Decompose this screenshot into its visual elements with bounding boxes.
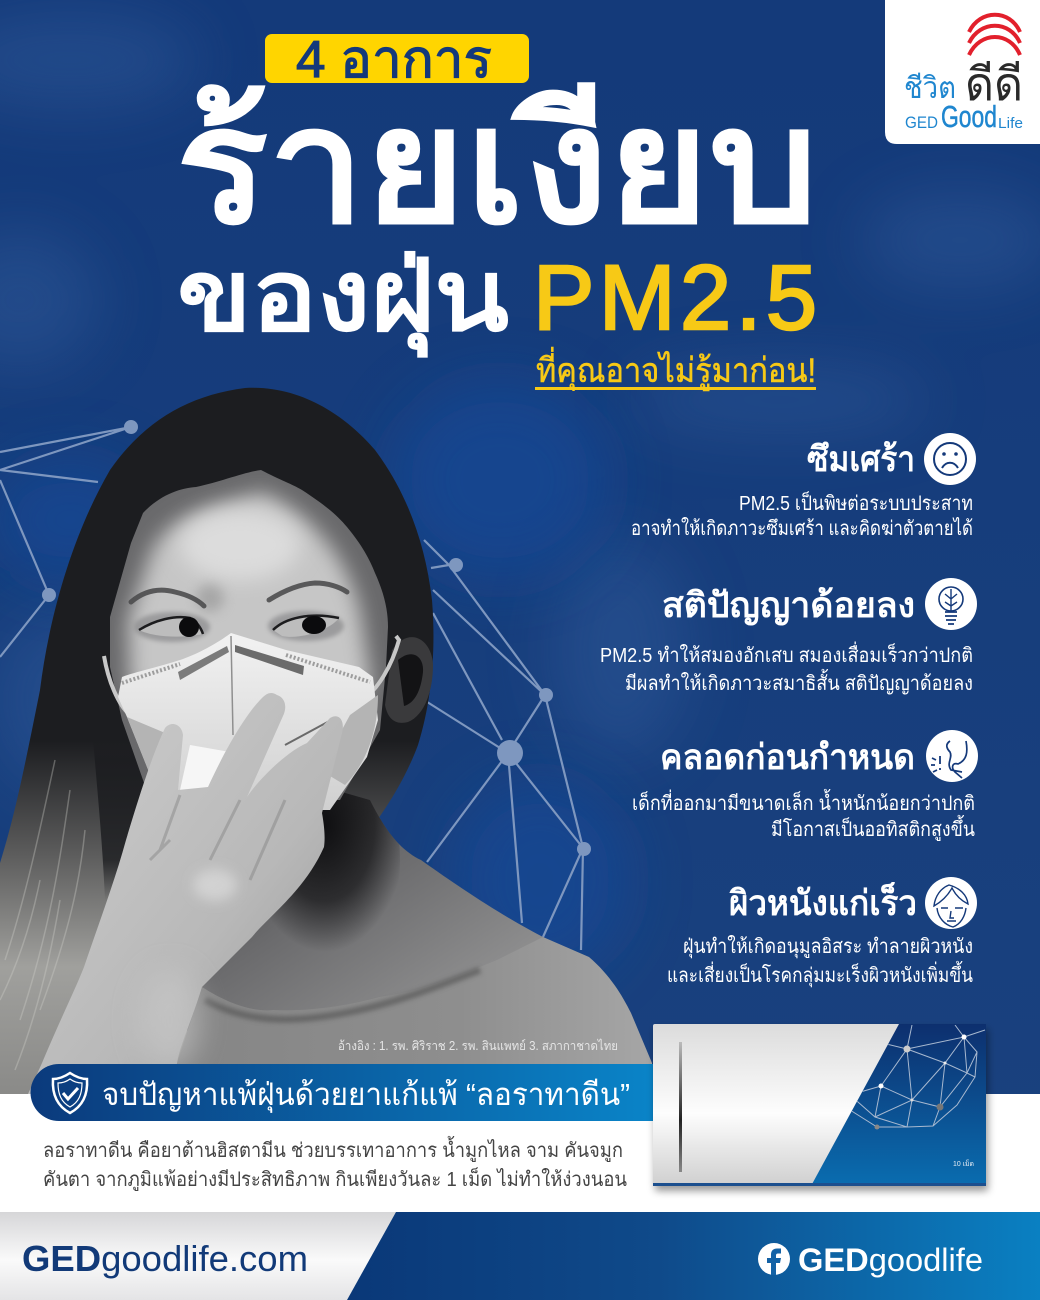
- white product band: [0, 1094, 1040, 1212]
- title block: [176, 31, 818, 391]
- symptom 3: premature birth: คลอดก่อนกำหนด: [660, 738, 915, 777]
- neck shadow: [274, 792, 400, 946]
- symptom 3: premature birth: มีโอกาสเป็นออทิสติกสูงขึ้น: [771, 815, 975, 842]
- banner: end dust allergy: จบปัญหาแพ้ฝุ่นด้วยยาแก้แพ้ “ลอราทาดีน”: [102, 1077, 630, 1114]
- logo text: GED: [905, 113, 938, 132]
- footer: left website strip: [0, 1212, 420, 1300]
- dark hair beside the hand: [95, 758, 144, 896]
- footer: right social strip: GEDgoodlife: [798, 1242, 983, 1278]
- logo arcs: [969, 15, 1020, 55]
- yellow pill: 4 symptoms: 4 อาการ: [296, 31, 492, 89]
- symptom 1: depression: อาจทำให้เกิดภาวะซึมเศร้า และคิดฆ่าตัวตายได้: [631, 517, 973, 540]
- hair: [0, 388, 433, 1094]
- main heading line 1: ร้ายเงียบ: [176, 76, 818, 257]
- product description: ลอราทาดีน คือยาต้านฮิสตามีน ช่วยบรรเทาอาการ น้ำมูกไหล จาม คันจมูก: [43, 1136, 623, 1163]
- product box: 10 เม็ด: [953, 1159, 974, 1168]
- logo text: ชีวิต: [904, 72, 956, 105]
- symptom 2: reduced intelligence: สติปัญญาด้อยลง: [662, 586, 915, 626]
- product box: [653, 1024, 986, 1186]
- logo text: Good: [941, 99, 997, 134]
- symptom 1: depression: [631, 433, 976, 540]
- references note: อ้างอิง : 1. รพ. ศิริราช 2. รพ. สินแพทย์ 3. สภากาชาดไทย: [338, 1039, 618, 1053]
- icon: brain light bulb: [925, 578, 977, 630]
- symptom 4: premature skin ageing: และเสี่ยงเป็นโรคกลุ่มมะเร็งผิวหนังเพิ่มขึ้น: [667, 961, 973, 988]
- eyes: [134, 611, 344, 642]
- product description: [43, 1136, 627, 1192]
- ear: [385, 637, 433, 723]
- symptom 4: premature skin ageing: ฝุ่นทำให้เกิดอนุมูลอิสระ ทำลายผิวหนัง: [683, 935, 973, 959]
- banner: end dust allergy: [30, 1064, 655, 1121]
- symptom 3: premature birth: [632, 730, 978, 842]
- box globe network: [850, 1025, 985, 1130]
- face: [110, 470, 388, 800]
- logo text: ดีดี: [965, 58, 1023, 110]
- logo panel: [885, 0, 1040, 144]
- PM2.5: PM2.5: [533, 247, 817, 349]
- photo: woman wearing a mask: [0, 388, 652, 1094]
- main heading line 2: ของฝุ่น: [177, 240, 509, 358]
- symptom 4: premature skin ageing: [667, 877, 977, 988]
- symptom 4: premature skin ageing: ผิวหนังแก่เร็ว: [729, 881, 917, 923]
- symptom 3: premature birth: เด็กที่ออกมามีขนาดเล็ก น้ำหนักน้อยกว่าปกติ: [632, 789, 975, 815]
- icon: facebook: [758, 1243, 790, 1275]
- symptom 2: reduced intelligence: [600, 578, 977, 695]
- network of lines and nodes: [0, 420, 591, 950]
- logo text: [904, 58, 1023, 134]
- eyebrows: [131, 583, 347, 606]
- subtitle: ที่คุณอาจไม่รู้มาก่อน!: [536, 347, 816, 391]
- symptom 1: depression: PM2.5 เป็นพิษต่อระบบประสาท: [739, 490, 973, 515]
- icon: shield with check: [53, 1073, 87, 1113]
- product description: คันตา จากภูมิแพ้อย่างมีประสิทธิภาพ กินเพียงวันละ 1 เม็ด ไม่ทำให้ง่วงนอน: [43, 1166, 627, 1192]
- logo text: Life: [998, 115, 1023, 132]
- footer: left website strip: GEDgoodlife.com: [22, 1238, 308, 1279]
- symptom 1: depression: ซึมเศร้า: [807, 440, 915, 479]
- symptom 2: reduced intelligence: PM2.5 ทำให้สมองอักเสบ สมองเสื่อมเร็วกว่าปกติ: [600, 641, 973, 667]
- symptom 2: reduced intelligence: มีผลทำให้เกิดภาวะสมาธิสั้น สติปัญญาด้อยลง: [625, 669, 973, 695]
- hand covering the mask: [28, 693, 343, 1094]
- hair strands: [0, 760, 85, 1070]
- icon: pregnant woman: [926, 730, 978, 782]
- grey sweater: [186, 937, 652, 1064]
- neck and chest: [187, 796, 543, 1030]
- mask: [118, 633, 378, 810]
- icon: sad face: [924, 433, 976, 485]
- icon: aged face: [925, 877, 977, 929]
- ear loops: [104, 636, 399, 715]
- footer: right social strip: [347, 1212, 1040, 1300]
